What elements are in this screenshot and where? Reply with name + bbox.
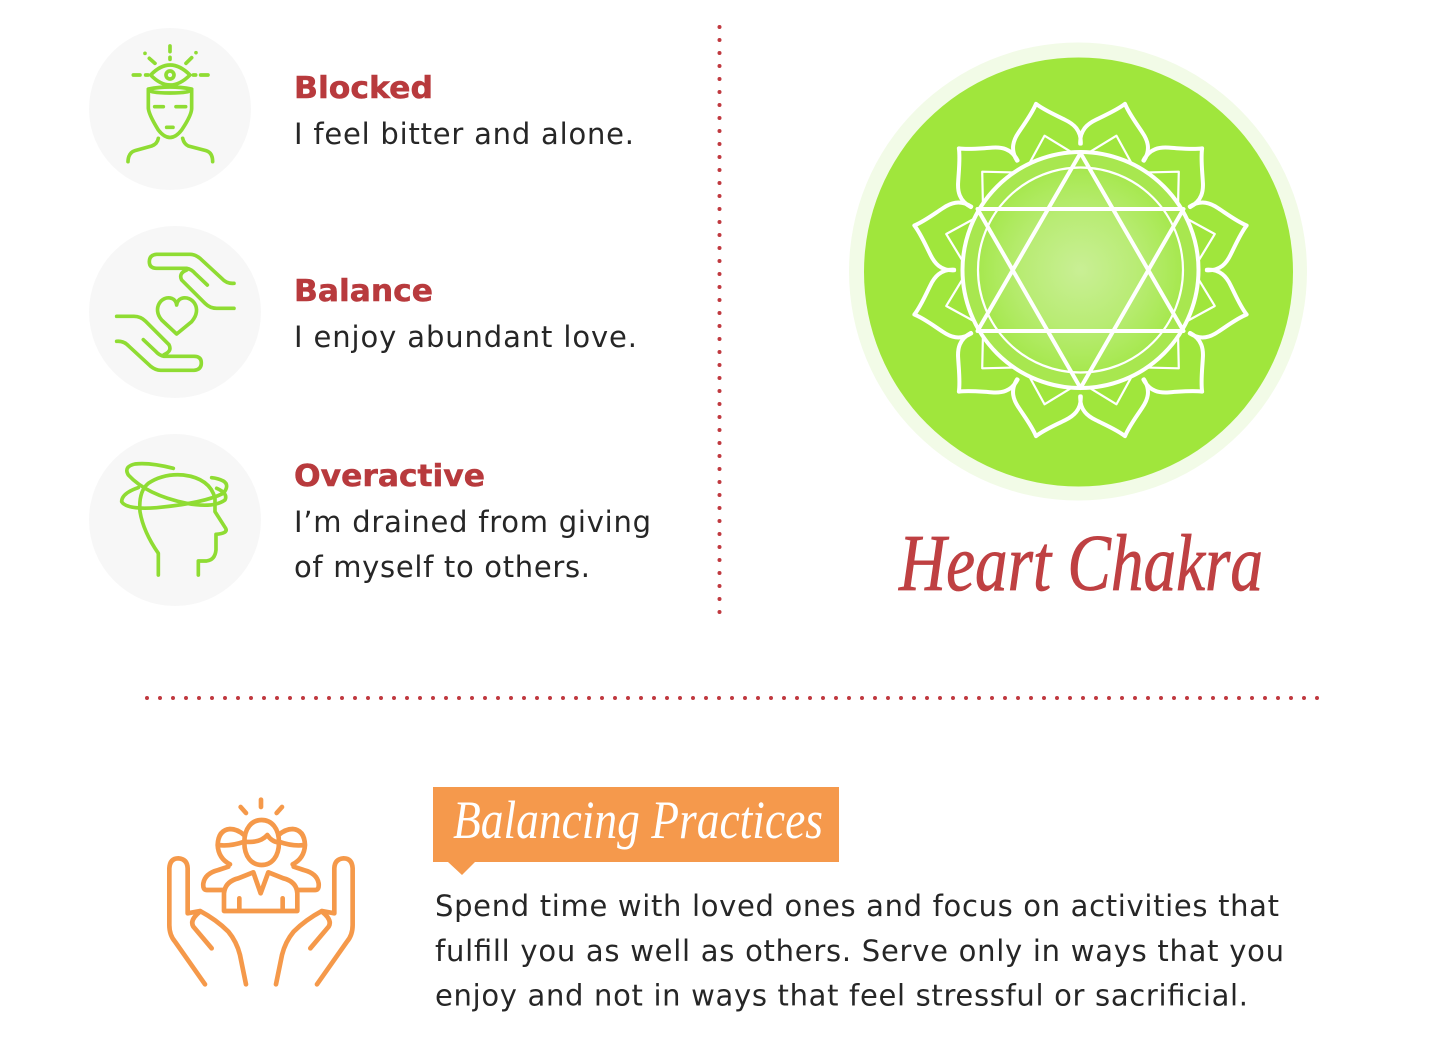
text: balancing practices description: fulfill you as well as others. Serve only in ways that you xyxy=(435,934,1284,968)
icon: heart chakra mandala xyxy=(849,42,1307,500)
heading: Balance: Balance xyxy=(294,274,433,309)
text: overactive statement: I’m drained from giving xyxy=(294,505,651,539)
heading: Overactive: Overactive xyxy=(294,459,485,494)
title: Heart Chakra: Heart Chakra xyxy=(898,520,1263,608)
heading: Blocked: Blocked xyxy=(294,71,433,106)
text: balancing practices description: Spend time with loved ones and focus on activities that xyxy=(435,889,1279,923)
text: balance statement: I enjoy abundant love. xyxy=(294,320,637,354)
text: blocked statement: I feel bitter and alone. xyxy=(294,117,634,151)
banner: Balancing Practices: Balancing Practices xyxy=(453,790,823,850)
banner: Balancing Practices xyxy=(433,787,839,875)
text: balancing practices description: enjoy and not in ways that feel stressful or sacrificial. xyxy=(435,978,1248,1012)
icon: overactive, head with swirling orbits xyxy=(89,434,261,606)
icon: balance, hands holding heart xyxy=(89,226,261,398)
text: overactive statement xyxy=(294,505,651,584)
icon: hands holding a group of people xyxy=(169,800,353,984)
text: overactive statement: of myself to others. xyxy=(294,550,590,584)
icon: blocked, head with third eye xyxy=(89,28,251,190)
text: balancing practices description xyxy=(435,889,1284,1012)
